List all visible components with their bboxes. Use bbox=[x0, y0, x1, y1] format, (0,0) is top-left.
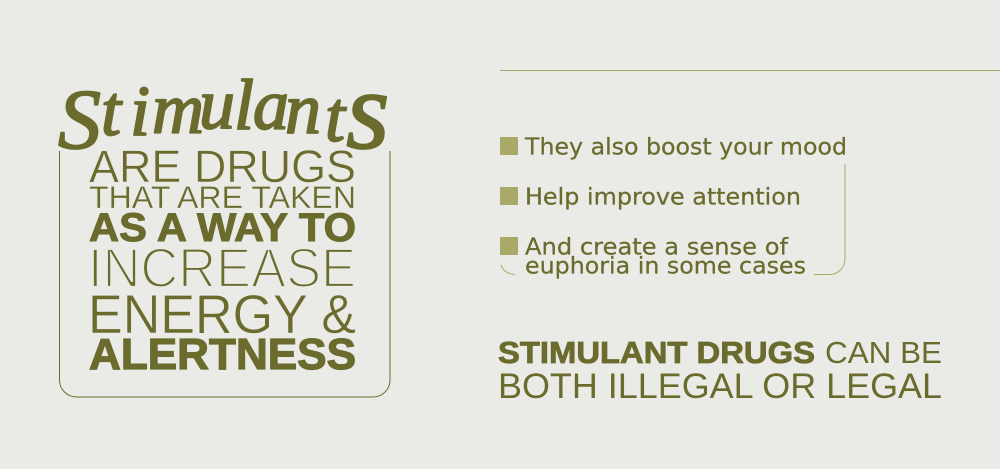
text: that are taken: THAT ARE TAKEN bbox=[89, 179, 356, 215]
text: can be: CAN BE bbox=[825, 335, 942, 370]
text: both illegal or legal: BOTH ILLEGAL OR LEGAL bbox=[498, 367, 942, 406]
bracket outline bbox=[501, 164, 845, 274]
bullet: euphoria: And create a sense of bbox=[525, 234, 789, 260]
heading: Stimulants: S bbox=[58, 71, 101, 167]
text: energy and: ENERGY & bbox=[88, 283, 356, 345]
text: as a way to: AS A WAY TO bbox=[89, 206, 356, 250]
heading: Stimulants: s bbox=[346, 49, 390, 173]
bullet: mood: They also boost your mood bbox=[524, 134, 847, 160]
bullet list bbox=[500, 134, 847, 280]
closing statement bbox=[498, 335, 942, 406]
bullet: euphoria bbox=[500, 234, 806, 280]
bullet: euphoria: euphoria in some cases bbox=[525, 254, 806, 280]
bullet: attention: Help improve attention bbox=[525, 184, 801, 210]
text: alertness: ALERTNESS bbox=[89, 331, 356, 379]
text: stimulant drugs: STIMULANT DRUGS bbox=[498, 335, 815, 370]
panel: stimulants definition bbox=[58, 49, 390, 397]
panel outline bbox=[60, 151, 390, 397]
text: are drugs: ARE DRUGS bbox=[89, 141, 356, 192]
text: increase: INCREASE bbox=[88, 236, 356, 299]
heading: Stimulants: timulant bbox=[101, 64, 347, 157]
